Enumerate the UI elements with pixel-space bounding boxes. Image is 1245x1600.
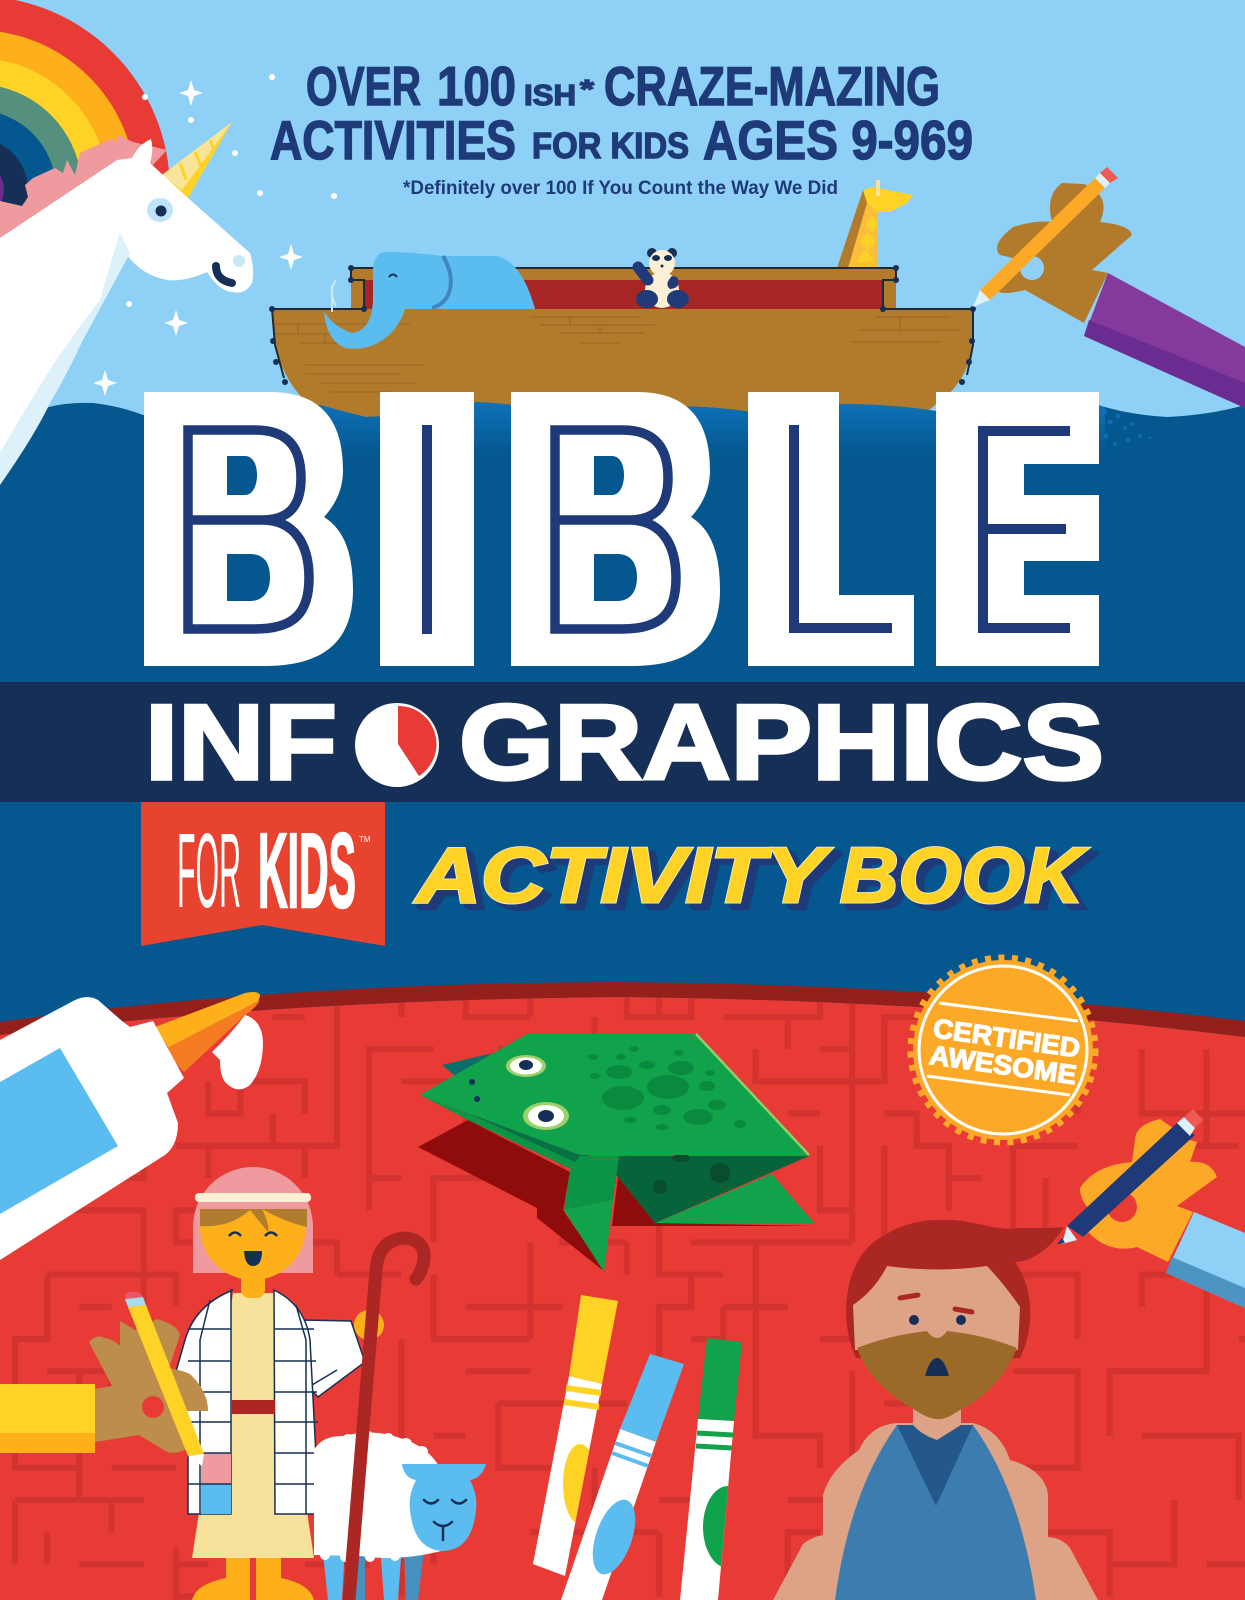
INFOGRAPHICS title: INF [145,682,337,802]
hair with sweep [846,1220,1064,1358]
yellow marker [533,1295,618,1576]
horn [162,122,232,198]
shepherd [163,1167,384,1600]
head and neck [0,139,253,453]
nozzle [155,992,260,1072]
water [0,402,1245,1100]
for kids banner: FOR [177,812,241,930]
frog eyes [506,1055,546,1077]
bottom left hand with pencil [0,1292,208,1466]
green marker [680,1338,742,1600]
activity book: ACTIVITY [419,835,837,923]
unicorn [0,122,253,485]
activity book: BOOK [848,837,1097,925]
hand [997,183,1132,323]
letter B second [511,392,720,666]
big title BIBLE [144,392,1099,666]
certified awesome badge: AWESOME [928,1040,1078,1090]
shepherd staff [349,1238,424,1600]
shoulders and arms [773,1423,1098,1600]
coat with grid [163,1290,319,1514]
headline tagline: ACTIVITIES [270,109,516,171]
letter B [144,392,353,666]
certified awesome badge: CERTIFIED [931,1013,1082,1064]
activity book: BOOK [840,831,1089,919]
sheep [314,1431,486,1600]
hand [1080,1119,1217,1262]
maroon band [0,982,1245,1037]
pencil [128,1305,204,1456]
letter E [936,392,1099,666]
tunic [835,1425,1036,1600]
for kids banner [141,802,385,946]
bottle body [0,997,184,1260]
rainbow [0,0,169,206]
navy pencil [1067,1123,1195,1237]
face details [229,1232,277,1236]
for kids banner: TM [359,835,371,844]
blue marker [561,1354,684,1600]
bottle label [0,1048,118,1214]
glue drip [212,1015,263,1089]
headline tagline: 100 [437,55,516,117]
ark hull [272,309,973,424]
origami frog [418,1034,815,1272]
coat color blocks [201,1453,231,1484]
red maze ground [0,985,1245,1600]
headcloth [193,1167,313,1273]
INFOGRAPHICS title [145,682,1104,802]
body top [420,1034,809,1155]
activity book: BOOK [845,835,1094,923]
face [853,1266,1020,1350]
navy title bar [0,682,1245,802]
pie chart letter O [355,703,439,787]
headline tagline [270,55,973,171]
coat sleeve right [302,1320,365,1397]
headline tagline: ISH [524,80,576,112]
hair [200,1209,307,1232]
neck [913,1405,961,1440]
activity book: ACTIVITY [414,831,832,919]
right hand with navy pencil [1057,1109,1245,1308]
activity book: BOOK [840,831,1089,919]
activity book [414,831,1097,925]
headline tagline: AGES 9-969 [703,109,973,171]
elephant [324,252,535,349]
activity book: ACTIVITY [422,837,840,925]
certified awesome badge [911,958,1095,1142]
glue bottle [0,992,263,1260]
headline tagline: CRAZE-MAZING [604,55,940,117]
headline tagline: FOR KIDS [532,125,689,166]
headband [195,1193,311,1202]
hand on staff [354,1310,384,1340]
hand [89,1319,208,1453]
footnote: *Definitely over 100 If You Count the Way We Did [403,178,838,199]
face details [900,1295,972,1312]
lower leg [655,1174,815,1224]
headline tagline: * [580,74,595,104]
panda [636,248,689,308]
light blue sleeve [1166,1212,1245,1308]
lower jaw [420,1095,590,1170]
bearded man [773,1220,1098,1600]
under body [590,1156,809,1223]
activity book: ACTIVITY [414,831,832,919]
belt [232,1400,275,1414]
shadow [418,1120,605,1272]
pencil [980,178,1105,300]
headline tagline: OVER [306,55,421,117]
beard [857,1331,1017,1419]
neck and face [241,1270,265,1298]
robe [192,1293,314,1558]
INFOGRAPHICS title: GRAPHICS [459,682,1104,802]
sparkles and stars [93,74,337,396]
giraffe [837,180,913,268]
purple sleeve [1084,273,1245,408]
legs and feet [192,1550,314,1600]
letter L [748,392,914,666]
top right hand with pencil [973,167,1245,408]
frog spots [588,1046,746,1130]
yellow sleeve [0,1384,95,1433]
letter I [380,392,474,666]
front leg [564,1156,619,1210]
ark [269,265,976,424]
ark cabin [351,268,896,309]
mane [0,135,167,240]
back foot [442,1053,493,1076]
for kids banner: KIDS [258,812,356,930]
